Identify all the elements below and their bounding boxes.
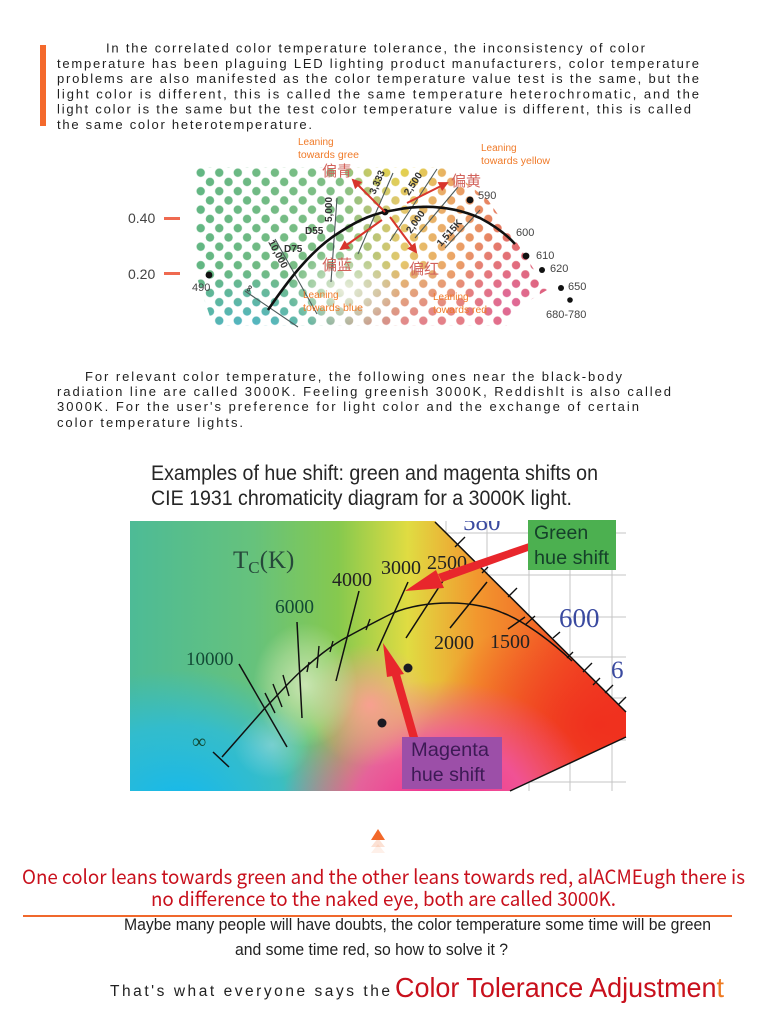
- red statement: [22, 861, 745, 912]
- chinese labels: 偏红: [409, 261, 439, 278]
- question text: [124, 915, 711, 959]
- closing line: Color Tolerance Adjustment: [395, 972, 724, 1003]
- temperature labels: 1500: [490, 631, 530, 653]
- closing line: [110, 972, 724, 1003]
- callout: green hue shift: Green: [534, 522, 588, 544]
- temperature labels: [186, 547, 530, 753]
- figure title: Examples of hue shift: green and magenta shifts on: [151, 461, 598, 485]
- sample points: [378, 664, 412, 728]
- temperature labels: 4000: [332, 569, 372, 591]
- divider rule: [23, 915, 732, 917]
- chinese labels: 偏青: [322, 163, 352, 180]
- question text: and some time red, so how to solve it ?: [235, 940, 508, 959]
- spectral points: [206, 197, 573, 303]
- red statement: One color leans towards green and the other leans towards red, alACMEugh there is: [22, 861, 745, 890]
- temperature labels: 2500: [427, 552, 467, 574]
- isotherm lines: [245, 169, 480, 327]
- second paragraph: 3000K. For the user's preference for light color and the exchange of certain: [57, 399, 639, 414]
- grid: [435, 521, 626, 791]
- temperature labels: 6000: [275, 597, 314, 618]
- chart: CIE 1931 diagram: [130, 520, 626, 792]
- wavelength labels: 600: [516, 227, 534, 239]
- leaning labels: Leaning: [298, 137, 334, 148]
- wavelength labels: [464, 521, 623, 678]
- magenta shift arrow: [383, 643, 418, 739]
- wavelength labels: 600: [559, 603, 600, 633]
- callout: green hue shift: [528, 520, 616, 570]
- wavelength labels: 680-780: [546, 309, 586, 321]
- isotherm labels: 3,333: [368, 168, 388, 196]
- isotherm labels: 1,515K: [435, 217, 465, 249]
- icon: up arrow: [371, 829, 385, 853]
- closing line: That's what everyone says the: [110, 983, 390, 1000]
- point A: [382, 209, 388, 215]
- isotherm labels: ∞: [243, 283, 256, 294]
- accent bar: [40, 45, 46, 126]
- question text: Maybe many people will have doubts, the color temperature some time will be green: [124, 915, 711, 934]
- second paragraph: color temperature lights.: [57, 415, 243, 430]
- red statement: no difference to the naked eye, both are called 3000K.: [151, 883, 616, 912]
- isotherm lines: [239, 570, 525, 747]
- colour field: [130, 521, 626, 791]
- intro paragraph: temperature has been plaguing LED lighting product manufacturers, color temperature: [57, 56, 699, 71]
- intro paragraph: the same color heterotemperature.: [57, 117, 312, 132]
- axis labels: 0.20: [128, 266, 155, 282]
- edge ticks: [455, 537, 626, 705]
- temperature labels: ∞: [192, 731, 206, 753]
- wavelength labels: 580: [463, 509, 500, 536]
- leaning labels: Leaning: [481, 143, 517, 154]
- isotherm labels: [243, 168, 465, 294]
- second paragraph: For relevant color temperature, the following ones near the black-body: [85, 369, 622, 384]
- dot colour field: [196, 168, 547, 326]
- axis labels: [128, 210, 180, 282]
- wavelength labels: 590: [478, 190, 496, 202]
- leaning labels: [298, 137, 551, 316]
- temperature labels: T: [233, 547, 248, 574]
- intro paragraph: light color is different, this is called the same temperature heterochromatic, and the: [57, 86, 699, 102]
- figure title: [151, 461, 598, 510]
- leaning labels: towards red: [433, 305, 487, 316]
- intro paragraph: In the correlated color temperature tolerance, the inconsistency of color: [106, 40, 646, 56]
- callout: magenta hue shift: [402, 737, 502, 789]
- axis labels: 0.40: [128, 210, 155, 226]
- callout: magenta hue shift: Magenta: [411, 739, 489, 761]
- chinese labels: [322, 163, 481, 278]
- isotherm labels: 5,000: [324, 197, 335, 222]
- intro paragraph: problems are also manifested as the color temperature value test is the same, but the: [57, 71, 699, 86]
- wavelength labels: [192, 190, 586, 321]
- leaning labels: Leaning: [303, 290, 339, 301]
- isotherm labels: D55: [305, 226, 324, 237]
- blackbody curve and infinity cap: [213, 603, 572, 767]
- isotherm labels: 10,000: [265, 238, 290, 271]
- black body curve: [268, 207, 515, 310]
- chart: dotted chromaticity diagram: [128, 138, 586, 328]
- intro paragraph: light color is the same but the test color temperature value is different, this is called: [57, 102, 691, 116]
- green shift arrow: [405, 543, 531, 591]
- wavelength labels: 490: [192, 282, 210, 294]
- shift arrows: [341, 180, 447, 252]
- temperature labels: 3000: [381, 557, 421, 579]
- temperature labels: (K): [260, 547, 294, 574]
- leaning labels: towards blue: [303, 303, 363, 314]
- wavelength labels: 610: [536, 250, 554, 262]
- callout: magenta hue shift: hue shift: [411, 764, 486, 786]
- isotherm labels: D75: [284, 244, 303, 255]
- figure title: CIE 1931 chromaticity diagram for a 3000K light.: [151, 486, 572, 510]
- isotherm labels: 2,500: [402, 170, 425, 198]
- intro paragraph: [57, 40, 699, 132]
- wavelength labels: 6: [611, 657, 624, 684]
- temperature labels: C: [248, 558, 260, 577]
- temperature labels: 2000: [434, 632, 474, 654]
- curve ticks: [265, 619, 370, 713]
- callout: green hue shift: hue shift: [534, 547, 610, 569]
- second paragraph: radiation line are called 3000K. Feeling greenish 3000K, Reddishlt is also called: [57, 384, 671, 399]
- second paragraph: [57, 369, 671, 430]
- chinese labels: 偏蓝: [322, 257, 352, 274]
- isotherm labels: 2,000: [404, 209, 428, 236]
- temperature labels: 10000: [186, 649, 234, 670]
- chinese labels: 偏黄: [451, 173, 481, 190]
- leaning labels: towards gree: [298, 150, 359, 161]
- wavelength labels: 620: [550, 263, 568, 275]
- wavelength labels: 650: [568, 281, 586, 293]
- spectral locus edge: [435, 522, 626, 791]
- leaning labels: towards yellow: [481, 156, 551, 167]
- leaning labels: Leaning: [433, 292, 469, 303]
